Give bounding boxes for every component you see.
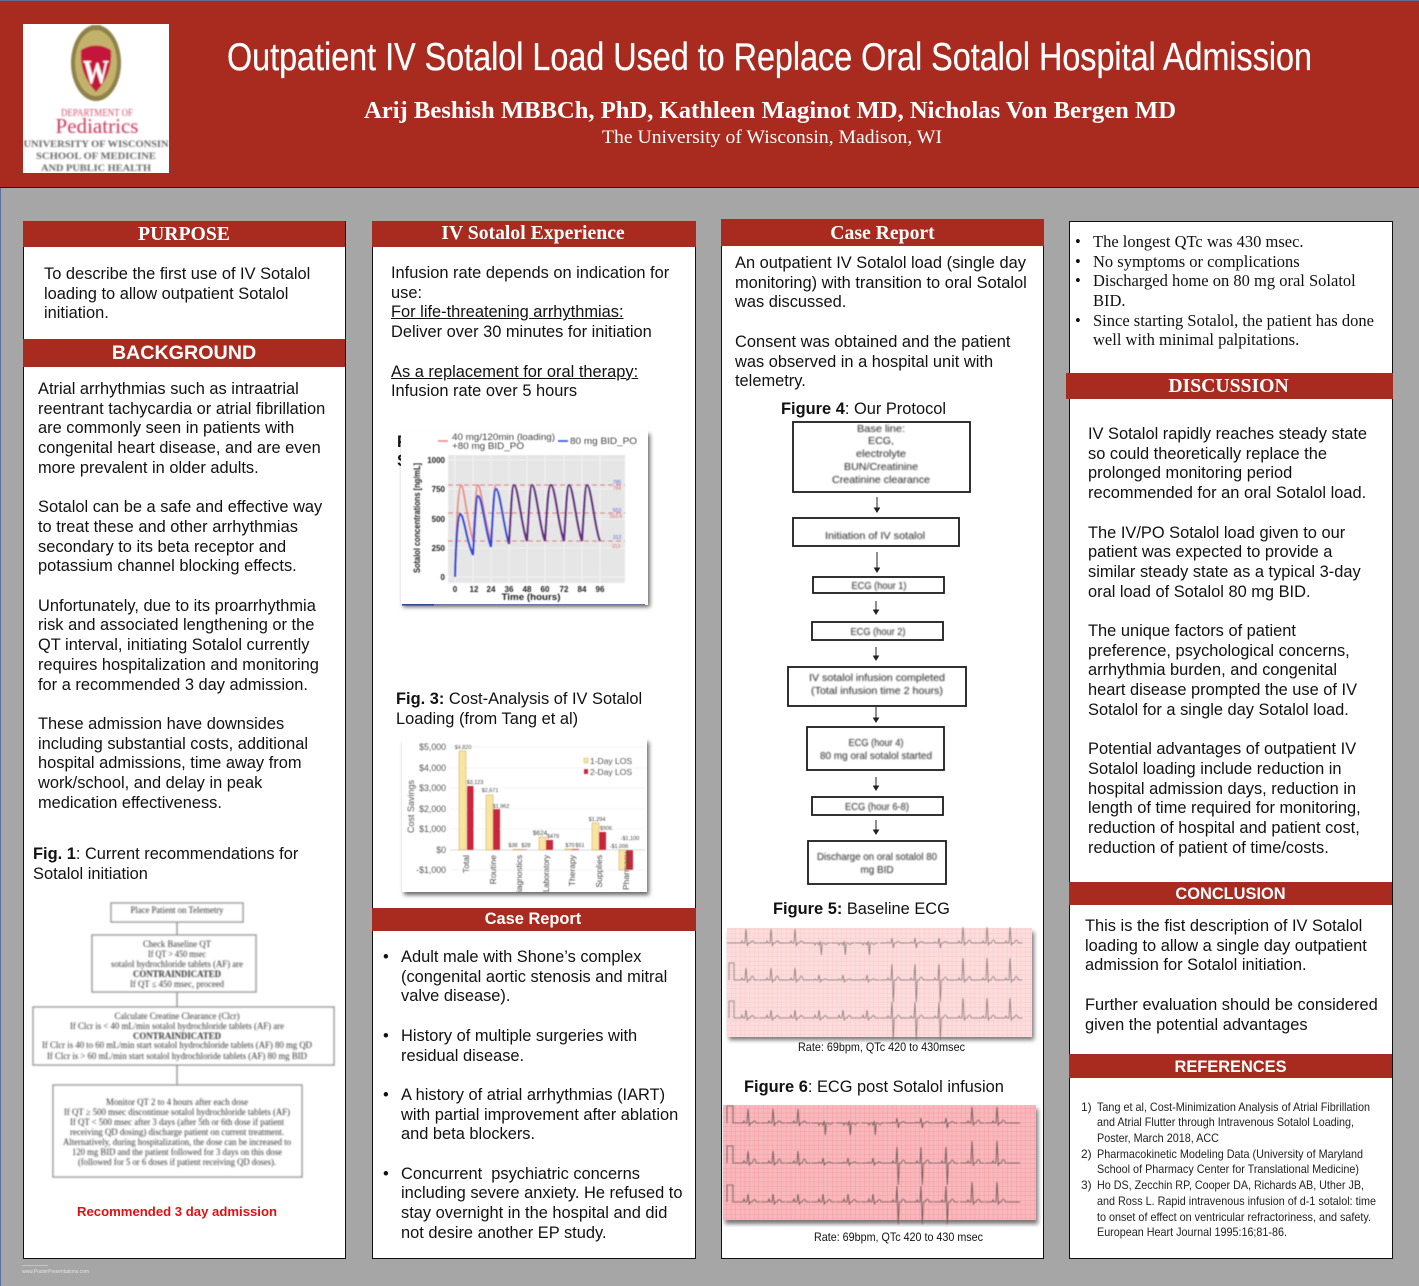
figure 2: sotalol concentration chart: S [397,452,408,470]
figure 4: protocol flowchart: ECG (hour 6-8) [845,801,909,813]
heading: IV sotalol experience [372,221,696,247]
figure 2: sotalol concentration chart: 500 [432,515,446,524]
figure 3: cost savings bar chart: -$1,006 [610,844,628,850]
figure 1: flowchart of current recommendations: CONTRAINDICATED [133,969,221,979]
figure 4: protocol flowchart: IV sotalol infusion completed [809,672,945,684]
figure 4: protocol flowchart [787,421,971,885]
figure 2: sotalol concentration chart: 96 [596,585,605,594]
heading: background [23,339,345,367]
heading: case report column 2: Case Report [485,910,581,928]
figure 1: flowchart of current recommendations: receiving QD dosing) discharge patient on current treatment. [70,1127,284,1137]
figure 2: sotalol concentration chart: 313 [613,535,621,541]
figure 2: sotalol concentration chart: 84 [578,585,587,594]
logo: department of pediatrics: DEPARTMENT OF [61,108,133,119]
heading: discussion [1066,373,1393,399]
figure 1: flowchart of current recommendations: If Clcr is 40 to 60 mL/min start sotalol hydrochloride tablets (AF) 80 mg QD [42,1040,312,1050]
figure 2: sotalol concentration chart: 12 [470,585,479,594]
figure 3: cost savings bar chart: $906 [600,826,612,832]
figure 1: flowchart of current recommendations: Check Baseline QT [143,939,211,949]
text: patient outcome bullets: The longest QTc was 430 msec. No symptoms or complications Discharged home on 80 mg oral Solatol BID. Since starting Sotalol, the patient has done well with minimal palpitations. [1093,232,1374,349]
figure 3: cost savings bar chart: Pharmacy [621,851,631,890]
logo: department of pediatrics: SCHOOL OF MEDICINE [36,152,156,162]
figure 3: cost savings bar chart: iagnostics [514,855,524,892]
figure 1: flowchart of current recommendations: Alternatively, during hospitalization, the dose can be increased to [63,1137,291,1147]
figure 1: flowchart of current recommendations: If QT < 500 msec after 3 days (after 5th or 6th dose if patient [70,1117,284,1127]
authors: Arij Beshish MBBCh, PhD, Kathleen Maginot MD, Nicholas Von Bergen MD [364,98,1176,124]
figure 2: sotalol concentration chart: 48 [523,585,532,594]
figure 1: flowchart of current recommendations: 120 mg BID and the patient followed for 3 days on this dose [72,1147,282,1157]
figure 4: protocol flowchart: electrolyte [856,448,906,460]
heading: purpose [23,221,345,247]
figure 3: cost savings bar chart [400,739,652,898]
footer credit [22,1265,89,1275]
figure 4: protocol flowchart: Base line: [857,423,905,435]
text: references: and Atrial Flutter through Intravenous Sotalol Loading, [1097,1115,1354,1129]
logo: department of pediatrics: Pediatrics [56,114,138,138]
figure 3: cost savings bar chart: 2-Day LOS [590,767,632,777]
text: references: 3) [1081,1178,1092,1192]
figure 3: cost savings bar chart: $28 [521,843,531,849]
text: infusion rate: Infusion rate depends on indication for use: For life-threatening arrhythmias: Deliver over 30 minutes for initiation As a replacement for oral therapy: Infusion rate over 5 hours [391,264,669,400]
heading: case report column 3 [721,219,1044,246]
figure 4: protocol flowchart: ECG (hour 1) [852,580,906,592]
footer credit: www.PosterPresentations.com [22,1269,89,1275]
figure 4: protocol flowchart: Creatinine clearance [832,474,930,486]
heading: references: REFERENCES [1174,1058,1287,1076]
heading: discussion: DISCUSSION [1168,375,1289,397]
panel: column 3 case report [721,221,1044,1259]
figure 3: cost savings bar chart: $3,000 [419,783,446,793]
figure 2: sotalol concentration chart: +80 mg BID_PO [452,441,524,451]
figure 2: sotalol concentration chart: 36 [505,585,514,594]
figure 4: protocol flowchart: mg BID [860,864,894,876]
figure 3: cost savings bar chart: 1-Day LOS [590,756,632,766]
panel: column 2 IV sotalol experience [372,221,696,1259]
figure 3: cost savings bar chart: $4,820 [455,745,471,751]
figure 4: protocol flowchart: Initiation of IV sotalol [825,530,925,542]
figure 3: cost savings bar chart: $0 [436,845,446,855]
figure 3: cost savings bar chart: $1,000 [419,824,446,834]
heading: conclusion: CONCLUSION [1175,885,1286,903]
text: patient outcome bullets: • • • • [1075,232,1081,330]
panel: column 1 purpose and background [23,221,346,1259]
figure 2: sotalol concentration chart: 0 [453,585,458,594]
figure 3: cost savings bar chart: $624 [533,830,548,837]
caption: figure 3: Fig. 3: Cost-Analysis of IV Sotalol Loading (from Tang et al) [396,690,642,728]
figure 2: sotalol concentration chart: 250 [432,544,446,553]
header banner [0,0,1419,188]
figure 3: cost savings bar chart: $1,294 [589,817,605,823]
figure 3: cost savings bar chart: $2,671 [482,788,498,794]
figure 3: cost savings bar chart: $5,000 [419,742,446,752]
affiliation: The University of Wisconsin, Madison, WI [602,127,942,148]
heading: case report column 2 [372,908,696,931]
figure 2: sotalol concentration chart [397,431,654,610]
text: references: School of Pharmacy Center for Translational Medicine) [1097,1162,1359,1176]
caption: figure 5: Figure 5: Baseline ECG [773,900,950,918]
figure 3: cost savings bar chart: -$1,000 [416,865,446,875]
logo: department of pediatrics: W [83,54,109,91]
figure 2: sotalol concentration chart: 553.6 [610,514,622,520]
figure 2: sotalol concentration chart: 750 [432,485,446,494]
figure 2: sotalol concentration chart: 784 [613,486,621,492]
heading: background: BACKGROUND [112,342,256,364]
figure 1: flowchart of current recommendations: Calculate Creatine Clearance (Clcr) [114,1011,240,1021]
figure 3: cost savings bar chart: $4,000 [419,763,446,773]
figure 3: cost savings bar chart: $70 [565,843,575,849]
heading: references [1069,1054,1392,1078]
caption: figure 6: Figure 6: ECG post Sotalol infusion [744,1078,1004,1096]
figure 4: protocol flowchart: ECG (hour 2) [850,626,906,638]
logo: department of pediatrics [23,24,169,173]
figure 1: flowchart of current recommendations: If QT > 450 msec [148,949,206,959]
figure 1: flowchart of current recommendations: Place Patient on Telemetry [130,905,224,915]
figure 2: sotalol concentration chart: Time (hours) [502,592,560,602]
figure 1: flowchart of current recommendations: If Clcr is < 40 mL/min sotalol hydrochloride tablets (AF) are [70,1021,284,1031]
figure 3: cost savings bar chart: Total [461,855,471,873]
figure 2: sotalol concentration chart: F [397,433,407,451]
figure 3: cost savings bar chart: $479 [547,834,559,840]
text: references: Poster, March 2018, ACC [1097,1131,1219,1145]
callout: recommended 3 day admission: Recommended 3 day admission [77,1204,277,1219]
figure 2: sotalol concentration chart: Sotalol concentrations [ng/mL] [412,463,422,573]
figure 4: protocol flowchart: 80 mg oral sotalol started [820,750,932,762]
text: references: 1) [1081,1100,1092,1114]
logo: department of pediatrics: UNIVERSITY OF WISCONSIN [24,140,169,150]
text: references [1081,1100,1376,1239]
figure 1: flowchart of current recommendations: Monitor QT 2 to 4 hours after each dose [106,1097,248,1107]
figure 3: cost savings bar chart: Routine [488,855,498,884]
figure 4: protocol flowchart: ECG (hour 4) [848,737,904,749]
figure 1: flowchart of current recommendations: If QT ≥ 500 msec discontinue sotalol hydrochloride tablets (AF) [64,1107,290,1117]
figure 4: protocol flowchart: (Total infusion time 2 hours) [811,685,943,697]
figure 2: sotalol concentration chart: 80 mg BID_PO [570,436,637,446]
figure 2: sotalol concentration chart: 313 [612,544,620,550]
figure 3: cost savings bar chart: -$1,100 [621,836,639,842]
figure 1: flowchart of current recommendations: sotalol hydrochloride tablets (AF) are [111,959,243,969]
figure 3: cost savings bar chart: $1,962 [493,804,509,810]
heading: purpose: PURPOSE [138,223,230,245]
figure 1: flowchart of current recommendations: (followed for 5 or 6 doses if patient receiving QD doses). [78,1157,276,1167]
figure 2: sotalol concentration chart: 60 [541,585,550,594]
figure 3: cost savings bar chart: $3,123 [467,780,483,786]
text: references: European Heart Journal 1995:16;81-86. [1097,1225,1287,1239]
figure 3: cost savings bar chart: $51 [575,843,585,849]
panel: column 4 outcome and discussion [1069,221,1393,1259]
text: case report description: An outpatient IV Sotalol load (single day monitoring) with transition to oral Sotalol was discussed. Consent was obtained and the patient was observed in a hospital unit with telemetry. [735,254,1027,390]
heading: conclusion [1069,882,1392,905]
figure 2: sotalol concentration chart: 72 [560,585,569,594]
figure 4: protocol flowchart: Discharge on oral sotalol 80 [817,851,937,863]
heading: case report column 3: Case Report [830,222,935,244]
figure 2: sotalol concentration chart: 40 mg/120min (loading) [452,432,555,442]
text: purpose: To describe the first use of IV Sotalol loading to allow outpatient Sotalol initiation. [44,265,310,322]
figure 5: baseline ECG [726,926,1037,1043]
text: case report bullets: • • • • [383,948,389,1183]
figure 4: protocol flowchart: ECG, [868,435,894,447]
figure 1: flowchart of current recommendations: If QT ≤ 450 msec, proceed [130,979,224,989]
text: background: Atrial arrhythmias such as intraatrial reentrant tachycardia or atrial fibrillation are commonly seen in patients with congenital heart disease, and are even more prevalent in older adults. Sotalol can be a safe and effective way to treat these and other arrhythmias secondary to its beta receptor and potassium channel blocking effects. Unfortunately, due to its proarrhythmia risk and associated lengthening or the QT interval, initiating Sotalol currently requires hospitalization and monitoring for a recommended 3 day admission. These admission have downsides including substantial costs, additional hospital admissions, time away from work/school, and delay in peak medication effectiveness. [38,380,325,812]
caption: figure 1: Fig. 1: Current recommendations for Sotalol initiation [33,845,298,883]
figure 2: sotalol concentration chart: 0 [441,573,446,582]
text: conclusion: This is the fist description of IV Sotalol loading to allow a single day outpatient admission for Sotalol initiation. Further evaluation should be considered given the potential advantages [1085,917,1378,1034]
figure 6: post infusion ECG [722,1104,1041,1227]
figure 3: cost savings bar chart: $2,000 [419,804,446,814]
text: case report bullets: Adult male with Shone’s complex (congenital aortic stenosis and mitral valve disease). History of multiple surgeries with residual disease. A history of atrial arrhythmias (IART) with partial improvement after ablation and beta blockers. Concurrent psychiatric concerns including severe anxiety. He refused to stay overnight in the hospital and did not desire another EP study. [401,948,682,1242]
figure 1: flowchart of current recommendations: If Clcr is > 60 mL/min start sotalol hydrochloride tablets (AF) 80 mg BID [47,1051,307,1061]
figure 1: flowchart of current recommendations [31,901,336,1179]
figure 2: sotalol concentration chart: 1000 [427,456,446,465]
figure 2: sotalol concentration chart: 24 [487,585,496,594]
caption: figure 4: Figure 4: Our Protocol [781,400,946,418]
figure 4: protocol flowchart: BUN/Creatinine [844,461,918,473]
figure 2: sotalol concentration chart: 785 [613,480,621,486]
text: discussion: IV Sotalol rapidly reaches steady state so could theoretically replace the prolonged monitoring period recommended for an oral Sotalol load. The IV/PO Sotalol load given to our patient was expected to provide a similar steady state as a typical 3-day oral load of Sotalol 80 mg BID. The unique factors of patient preference, psychological concerns, arrhythmia burden, and congenital heart disease prompted the use of IV Sotalol for a single day Sotalol load. Potential advantages of outpatient IV Sotalol loading include reduction in hospital admission days, reduction in length of time required for monitoring, reduction of hospital and patient cost, reduction of patient of time/costs. [1088,425,1367,857]
figure 3: cost savings bar chart: Laboratory [541,854,551,892]
figure 1: flowchart of current recommendations: CONTRAINDICATED [133,1031,221,1041]
figure 2: sotalol concentration chart: 553 [613,508,621,514]
text: references: 2) [1081,1147,1092,1161]
page left edge line [0,188,1,1286]
figure 3: cost savings bar chart: $38 [508,843,518,849]
figure 3: cost savings bar chart: Therapy [567,854,577,886]
figure 3: cost savings bar chart: Cost Savings [406,779,416,833]
figure 3: cost savings bar chart: Supplies [594,855,604,888]
heading: IV sotalol experience: IV Sotalol Experience [441,222,625,244]
